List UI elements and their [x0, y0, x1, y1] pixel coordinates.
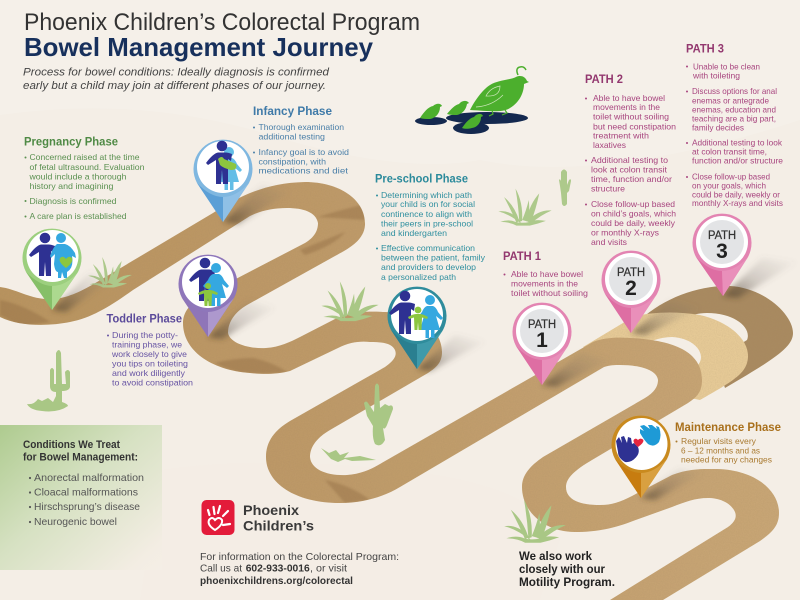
icon: red hand and heart	[202, 500, 234, 535]
plant: grass by pre-school path	[321, 281, 379, 321]
text block: Path 3: enemas, education and	[692, 104, 776, 114]
text block: infancy phase: additional testing	[258, 132, 325, 142]
intro text	[23, 66, 330, 92]
panel heading: for Bowel Management:	[23, 452, 138, 464]
text block: Path 1: toilet without soiling	[511, 288, 588, 298]
text block: pregnancy phase	[24, 136, 145, 221]
icon: family with child	[389, 291, 443, 338]
text block: Path 3: with toileting	[692, 71, 740, 81]
pin: Path 3	[692, 214, 797, 298]
road: main journey	[0, 182, 779, 600]
text block: pregnancy phase: would include a thorough	[28, 172, 127, 182]
text block: Path 1: movements in the	[511, 279, 578, 289]
plant: cactus in the road bend	[321, 384, 393, 462]
icon: parents with infant	[206, 141, 242, 190]
callout: motility program: Motility Program.	[519, 577, 615, 589]
pin: Path 2: 2	[625, 277, 637, 300]
text block: Path 2: PATH 2	[585, 74, 623, 86]
text block: Path 3: on your goals, which	[692, 180, 766, 190]
text block: pre-school phase: and kindergarten	[381, 228, 447, 238]
pin: Path 1	[512, 303, 610, 387]
text block: Path 3: enemas or antegrade	[692, 95, 769, 105]
contact information: For information on the Colorectal Program:	[200, 551, 399, 563]
text block: maintenance phase: Maintenance Phase	[675, 422, 781, 434]
pin: Path 3: 3	[716, 240, 728, 263]
pin: pre-school	[388, 287, 485, 371]
text block: pre-school phase: your child is on for social	[381, 199, 475, 209]
text block: pregnancy phase: of fetal ultrasound. Evaluation	[30, 162, 145, 172]
road shading streaks	[0, 205, 370, 503]
contact information: 602-933-0016	[246, 563, 310, 575]
contact information	[200, 551, 399, 587]
text block: Path 2: look at colon transit	[591, 165, 668, 175]
text block: toddler phase: Toddler Phase	[106, 314, 182, 326]
text block: Path 3: teaching are a big part,	[692, 113, 776, 123]
text block: Path 2: or monthly X-rays	[591, 228, 659, 238]
pin: Path 1: 1	[536, 329, 548, 352]
conditions list: Cloacal malformations	[34, 487, 138, 499]
panel heading: Conditions We Treat	[23, 439, 120, 451]
conditions list: Neurogenic bowel	[34, 516, 117, 528]
text block: toddler phase	[106, 314, 193, 388]
logo: Phoenix Children's	[202, 500, 314, 535]
road: Path 2	[583, 313, 748, 400]
panel: conditions we treat	[0, 425, 162, 570]
text block: Path 2: could be daily, weekly	[591, 218, 676, 228]
intro text: early but a child may join at different phases of our journey.	[23, 80, 326, 92]
text block: Path 3: Discuss options for anal	[692, 86, 777, 96]
pin: toddler	[178, 255, 275, 339]
text block: Path 3: Additional testing to look	[692, 137, 783, 147]
plant: grass near motility text	[504, 500, 566, 543]
text block: pre-school phase: continence to align with	[381, 209, 472, 219]
text block: Path 3: monthly X-rays and visits	[692, 198, 783, 208]
text block: toddler phase: you tips on toileting	[112, 359, 188, 369]
text block: pregnancy phase: history and imagining	[30, 181, 114, 191]
text block: infancy phase: constipation, with	[258, 157, 326, 167]
text block: Path 2: and visits	[591, 237, 627, 247]
icon: expecting parents	[29, 233, 76, 278]
pin: Path 2: PATH	[617, 267, 645, 279]
text block: Path 1	[503, 251, 588, 298]
text block: infancy phase: Infancy Phase	[253, 106, 332, 118]
text block: toddler phase: work closely to give	[111, 349, 187, 359]
icon: caring hands with heart	[616, 425, 660, 462]
text block: toddler phase: training phase, we	[112, 340, 182, 350]
text block: infancy phase: Thorough examination	[258, 122, 344, 132]
plant: grass by Path 2 text	[498, 189, 552, 226]
contact information: , or visit	[310, 563, 347, 575]
title: Phoenix Children’s Colorectal Program	[24, 9, 420, 36]
text block: maintenance phase	[675, 422, 781, 465]
text block: Path 2: laxatives	[593, 140, 626, 150]
callout: motility program: We also work	[519, 551, 593, 563]
text block: pregnancy phase: Concerned raised at the time	[30, 152, 140, 162]
text block: Path 2: structure	[591, 184, 625, 194]
text block: pre-school phase: Determining which path	[381, 190, 472, 200]
text block: Path 3: function and/or structure	[692, 156, 783, 166]
text block: maintenance phase: needed for any changes	[681, 455, 772, 465]
text block: Path 2: Additional testing to	[591, 155, 668, 165]
text block: Path 2: Able to have bowel	[593, 93, 665, 103]
text block: Path 2: time, function and/or	[591, 174, 672, 184]
text block: Path 1: PATH 1	[503, 251, 542, 263]
text block: pre-school phase: between the patient, family	[381, 253, 486, 263]
text block: toddler phase: During the potty-	[112, 330, 178, 340]
text block: toddler phase: and work diligently	[112, 368, 186, 378]
text block: infancy phase	[253, 106, 349, 176]
contact information: Call us at	[200, 563, 242, 575]
text block: Path 3: at colon transit time,	[692, 147, 767, 157]
panel heading	[23, 439, 138, 464]
text block: Path 3: PATH 3	[686, 43, 724, 55]
conditions list: Hirschsprung’s disease	[34, 501, 140, 513]
text block: maintenance phase: Regular visits every	[681, 436, 757, 446]
text block: pregnancy phase: A care plan is established	[30, 211, 127, 221]
conditions list	[29, 472, 144, 528]
text block: pre-school phase: their peers in pre-school	[381, 219, 473, 229]
text block: pre-school phase: Pre-school Phase	[375, 174, 468, 186]
text block: Path 1: Able to have bowel	[511, 269, 583, 279]
text block: pre-school phase: Effective communication	[381, 243, 475, 253]
icon: parents with toddler	[189, 258, 229, 306]
text block: Path 2: toilet without soiling	[593, 112, 669, 122]
plant: saguaro cactus on mound	[27, 350, 70, 411]
title	[24, 9, 420, 62]
text block: Path 3: Unable to be clean	[693, 61, 760, 71]
text block: pre-school phase: a personalized path	[381, 272, 456, 282]
icon: quail family	[415, 67, 529, 134]
plant: grass by pregnancy pin	[88, 257, 132, 287]
text block: Path 3: Close follow-up based	[692, 171, 770, 181]
text block: infancy phase: Infancy goal is to avoid	[258, 147, 349, 157]
text block: Path 2	[585, 74, 676, 247]
road: Path 3	[640, 286, 793, 388]
text block: Path 2: on child’s goals, which	[591, 209, 676, 219]
text block: Path 2: but need constipation	[593, 121, 676, 131]
intro text: Process for bowel conditions: Ideally diagnosis is confirmed	[23, 66, 330, 78]
text block: Path 2: treatment with	[593, 130, 649, 140]
logo: Phoenix Children's: Children’s	[243, 518, 314, 534]
pin: Path 3: PATH	[708, 230, 736, 242]
text block: Path 3: could be daily, weekly or	[692, 189, 780, 199]
text block: maintenance phase: 6 – 12 months and as	[681, 445, 760, 455]
text block: pre-school phase: and providers to develop	[381, 262, 476, 272]
conditions list: Anorectal malformation	[34, 472, 144, 484]
text block: Path 2: Close follow-up based	[591, 199, 675, 209]
pin: infancy	[194, 140, 290, 224]
pin: maintenance	[612, 416, 705, 500]
callout: motility program	[519, 551, 615, 589]
text block: Path 2: movements in the	[593, 102, 660, 112]
contact information: phoenixchildrens.org/colorectal	[200, 575, 353, 587]
pin: pregnancy	[22, 229, 110, 312]
text block: pre-school phase	[375, 174, 486, 282]
text block: pregnancy phase: Diagnosis is confirmed	[30, 196, 117, 206]
text block: Path 3: family decides	[692, 123, 744, 133]
pin: Path 2	[602, 251, 700, 335]
text block: pregnancy phase: Pregnancy Phase	[24, 136, 118, 148]
text block: infancy phase: medications and diet	[258, 166, 349, 176]
pin: Path 1: PATH	[528, 319, 556, 331]
logo: Phoenix Children's: Phoenix	[243, 502, 299, 518]
plant: small cactus	[559, 170, 571, 206]
title: Bowel Management Journey	[24, 32, 374, 62]
callout: motility program: closely with our	[519, 564, 606, 576]
text block: toddler phase: to avoid constipation	[112, 378, 193, 388]
text block: Path 3	[686, 43, 783, 208]
